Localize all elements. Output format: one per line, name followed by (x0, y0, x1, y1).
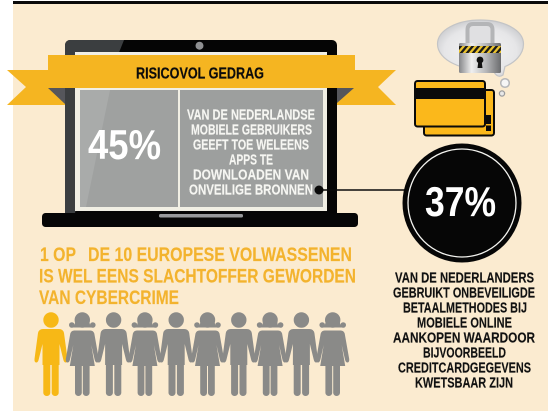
laptop screen (75, 52, 327, 211)
right text block: KWETSBAAR ZIJN (415, 376, 513, 392)
ribbon folds (48, 88, 354, 104)
icon: webcam (196, 42, 204, 50)
people row (34, 312, 349, 396)
right text block: MOBIELE ONLINE (417, 316, 512, 332)
laptop base (42, 213, 358, 227)
laptop text block: GEEFT TOE WELEENS (193, 138, 309, 154)
heading: cybercrime: IS WEL EENS SLACHTOFFER GEWORDEN (39, 266, 356, 288)
person: woman 4 (254, 312, 287, 396)
stat circle: 37% (402, 144, 522, 262)
person: man 4 (222, 312, 255, 396)
laptop hinge notch (159, 214, 243, 218)
person: man 2 (97, 312, 130, 396)
laptop text block: VAN DE NEDERLANDSE (187, 108, 315, 124)
heading: cybercrime: DE 10 EUROPESE VOLWASSENEN (88, 245, 352, 266)
laptop text block: MOBIELE GEBRUIKERS (191, 122, 312, 138)
screen panel left (80, 90, 178, 207)
laptop (42, 40, 358, 227)
ribbon tails (7, 70, 396, 105)
ribbon title: RISICOVOL GEDRAG (136, 66, 264, 82)
laptop text block: ONVEILIGE BRONNEN (189, 182, 313, 198)
thought bubble with padlock (438, 20, 524, 96)
icon: padlock (459, 24, 501, 73)
heading: cybercrime: 1 OP (40, 245, 76, 266)
top rule (13, 1, 548, 4)
heading: cybercrime: VAN CYBERCRIME (39, 288, 179, 309)
icon: credit cards (415, 81, 494, 136)
laptop text block: APPS TE (229, 152, 273, 168)
stat: 45%: 45% (88, 121, 161, 168)
connector line (314, 186, 405, 194)
person: man 3 (160, 312, 193, 396)
person: woman 3 (191, 312, 224, 396)
person: highlighted man (34, 312, 68, 396)
person: man 5 (285, 312, 318, 396)
laptop text block (187, 108, 315, 198)
laptop text block: DOWNLOADEN VAN (193, 168, 309, 184)
stat circle: 37%: 37% (425, 178, 496, 225)
person: woman 5 (316, 312, 349, 396)
heading: cybercrime (39, 245, 356, 309)
right text block (393, 270, 535, 392)
screen panel right (180, 90, 323, 207)
person: woman 1 (66, 312, 99, 396)
ribbon band (48, 55, 355, 88)
person: woman 2 (128, 312, 161, 396)
right text block: BIJVOORBEELD (423, 346, 506, 362)
